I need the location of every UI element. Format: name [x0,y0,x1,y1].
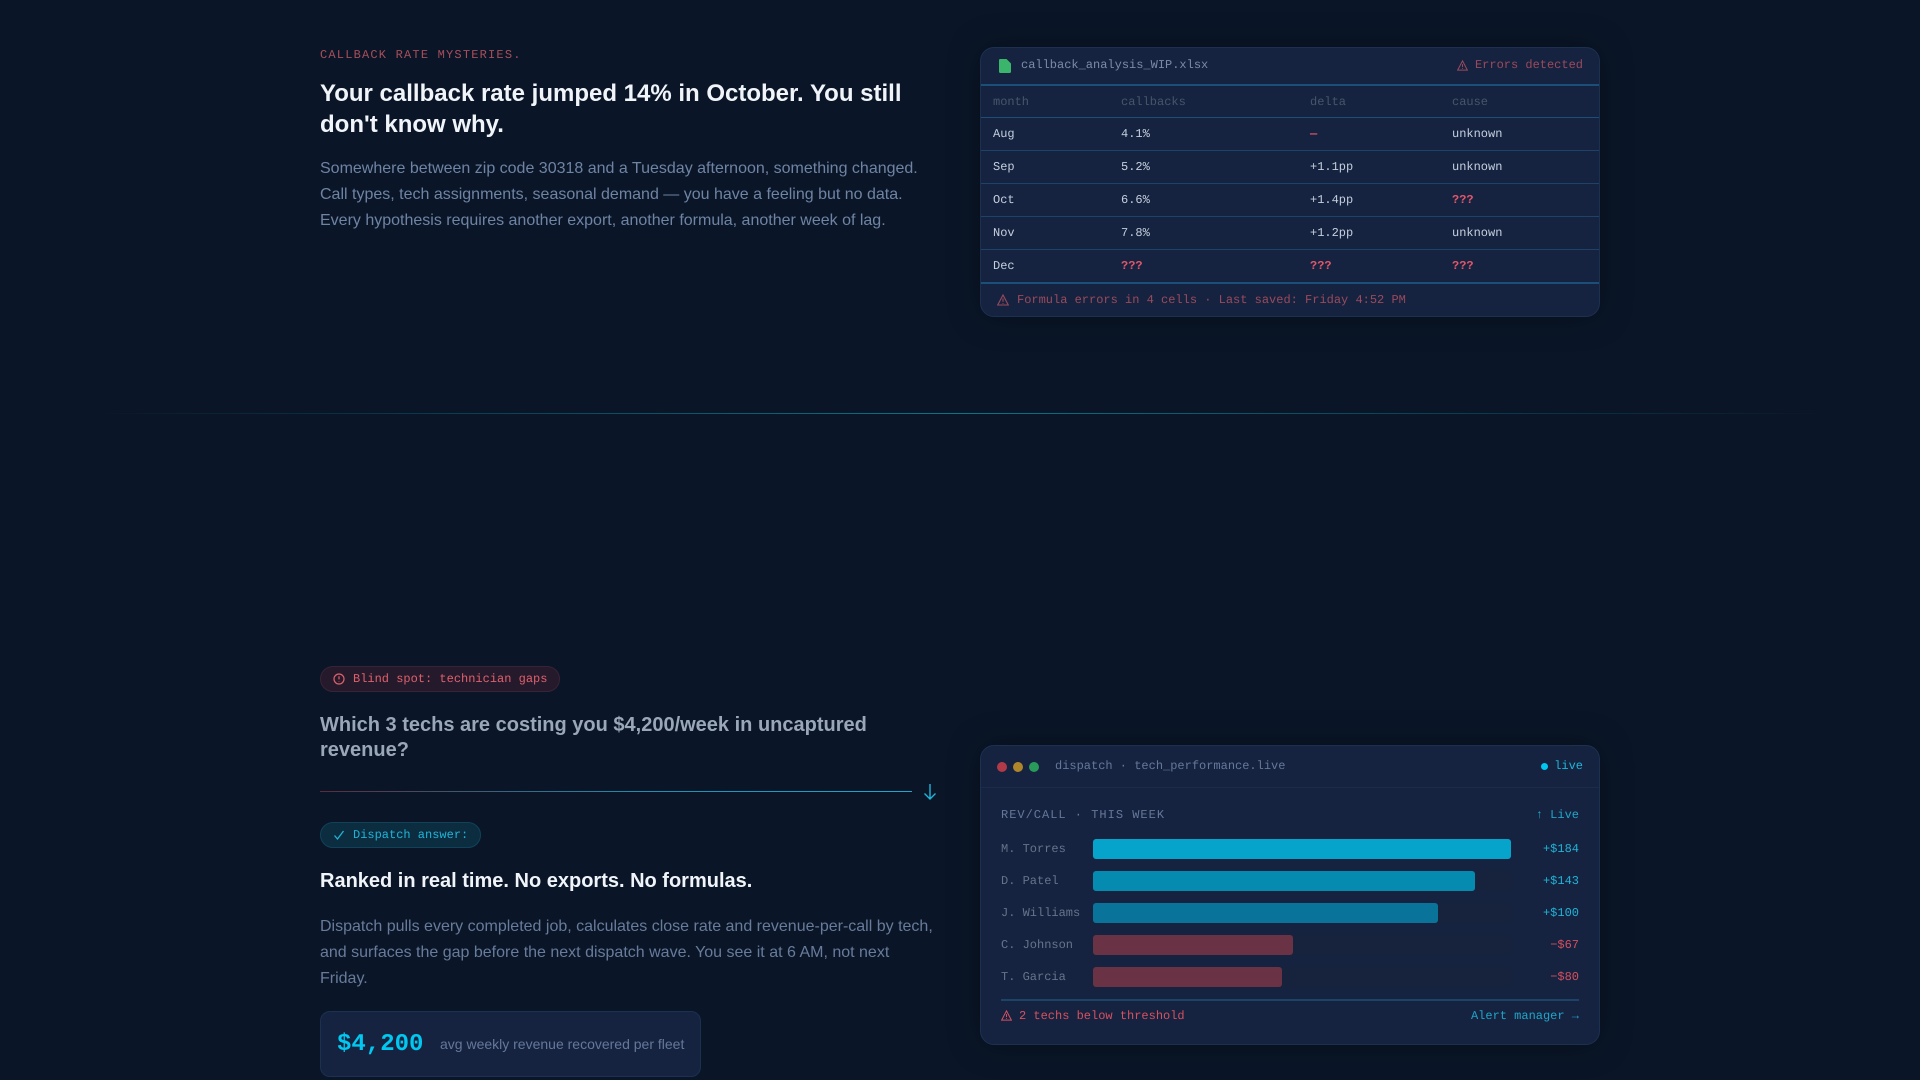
bar chart: revenue per call [1001,839,1579,987]
panel: spreadsheet with errors [980,47,1600,317]
icon: warning triangle [997,294,1009,306]
text block: problem description: Call types, tech assignments, seasonal demand — you have a feeling but no data. [320,186,903,203]
icon: warning triangle [1001,1010,1012,1021]
badge label: Dispatch answer: [353,828,468,842]
icon: green file [999,59,1011,73]
window title: dispatch · tech_performance.live [1055,759,1285,773]
stat card: weekly revenue recovered [320,1011,701,1077]
bar: C. Johnson: C. Johnson [1001,938,1073,952]
heading: question [320,714,867,761]
stat value: $4,200 [337,1031,423,1058]
text block: solution description: Friday. [320,970,368,987]
bar: J. Williams: J. Williams [1001,906,1080,920]
row: Nov: 7.8% [1121,226,1150,240]
badge: dispatch answer [320,822,481,848]
row: Oct: ??? [1452,193,1474,207]
chart trend label: ↑ Live [1536,808,1579,822]
bar: C. Johnson [1001,935,1579,955]
heading: callback rate jumped: don't know why. [320,111,504,138]
row: Aug: unknown [1452,127,1502,141]
row: Nov: unknown [1452,226,1502,240]
text block: solution description: and surfaces the gap before the next dispatch wave. You see it at 6 AM, not next [320,944,889,961]
live indicator: live [1554,759,1583,773]
table header row [993,95,1488,109]
table header row: delta [1310,95,1346,109]
bar: T. Garcia: T. Garcia [1001,970,1066,984]
bar: M. Torres [1001,839,1579,859]
heading: callback rate jumped: Your callback rate jumped 14% in October. You still [320,80,902,107]
bar: J. Williams [1001,903,1579,923]
row: Aug: 4.1% [1121,127,1150,141]
bar: D. Patel: +$143 [1543,874,1579,888]
connector line [320,791,912,792]
row: Sep: 5.2% [1121,160,1150,174]
table header row: cause [1452,95,1488,109]
row: Dec: ??? [1452,259,1474,273]
live indicator [1541,759,1583,773]
bar: D. Patel [1001,871,1579,891]
text block: problem description [320,160,918,229]
icon: check [334,830,344,840]
text block: problem description: Somewhere between zip code 30318 and a Tuesday afternoon, something changed. [320,160,918,177]
bar: T. Garcia: −$80 [1550,970,1579,984]
heading: ranked in real time: Ranked in real time. No exports. No formulas. [320,870,752,892]
window dots [997,762,1039,772]
bar: T. Garcia [1001,967,1579,987]
bar: C. Johnson: −$67 [1550,938,1579,952]
row: Sep: Sep [993,160,1015,174]
stat label: avg weekly revenue recovered per fleet [440,1036,684,1052]
row: Dec: Dec [993,259,1015,273]
heading: question: Which 3 techs are costing you $4,200/week in uncaptured [320,714,867,736]
row: Oct: +1.4pp [1310,193,1353,207]
row: Aug: Aug [993,127,1015,141]
text block: solution description: Dispatch pulls every completed job, calculates close rate and revenue-per-call by tech, [320,918,933,935]
alert: techs below threshold: 2 techs below threshold [1019,1009,1185,1023]
badge label: Blind spot: technician gaps [353,672,547,686]
row: Nov: +1.2pp [1310,226,1353,240]
row: Aug: — [1310,127,1317,141]
section divider [96,413,1824,414]
row: Oct: Oct [993,193,1015,207]
chart label: REV/CALL · THIS WEEK [1001,808,1165,822]
bar: D. Patel: D. Patel [1001,874,1059,888]
row: Aug [993,127,1502,141]
bar: M. Torres: +$184 [1543,842,1579,856]
table header row: month [993,95,1029,109]
panel: live tech performance [980,745,1600,1045]
row: Dec [993,259,1474,273]
text block: problem description: Every hypothesis requires another export, another formula, another week of lag. [320,212,886,229]
eyebrow: callback rate mysteries: CALLBACK RATE MYSTERIES. [320,48,522,62]
row: Dec: ??? [1121,259,1143,273]
error status: Errors detected [1475,58,1583,72]
heading: callback rate jumped [320,80,902,138]
row: Nov: Nov [993,226,1015,240]
file name: callback_analysis_WIP.xlsx [1021,58,1208,72]
row: Oct [993,193,1474,207]
row: Dec: ??? [1310,259,1332,273]
link: alert manager: Alert manager → [1471,1009,1579,1023]
icon: warning triangle [1457,60,1468,71]
arrow: down [924,784,936,800]
row: Oct: 6.6% [1121,193,1150,207]
text block: solution description [320,918,933,987]
bar: M. Torres: M. Torres [1001,842,1066,856]
row: Nov [993,226,1502,240]
row: Sep: +1.1pp [1310,160,1353,174]
row: Sep [993,160,1502,174]
bar: J. Williams: +$100 [1543,906,1579,920]
table header row: callbacks [1121,95,1186,109]
icon: alert circle [333,673,345,685]
footer: formula errors: Formula errors in 4 cells · Last saved: Friday 4:52 PM [1017,293,1406,307]
heading: question: revenue? [320,739,409,761]
badge: blind spot [320,666,560,692]
row: Sep: unknown [1452,160,1502,174]
